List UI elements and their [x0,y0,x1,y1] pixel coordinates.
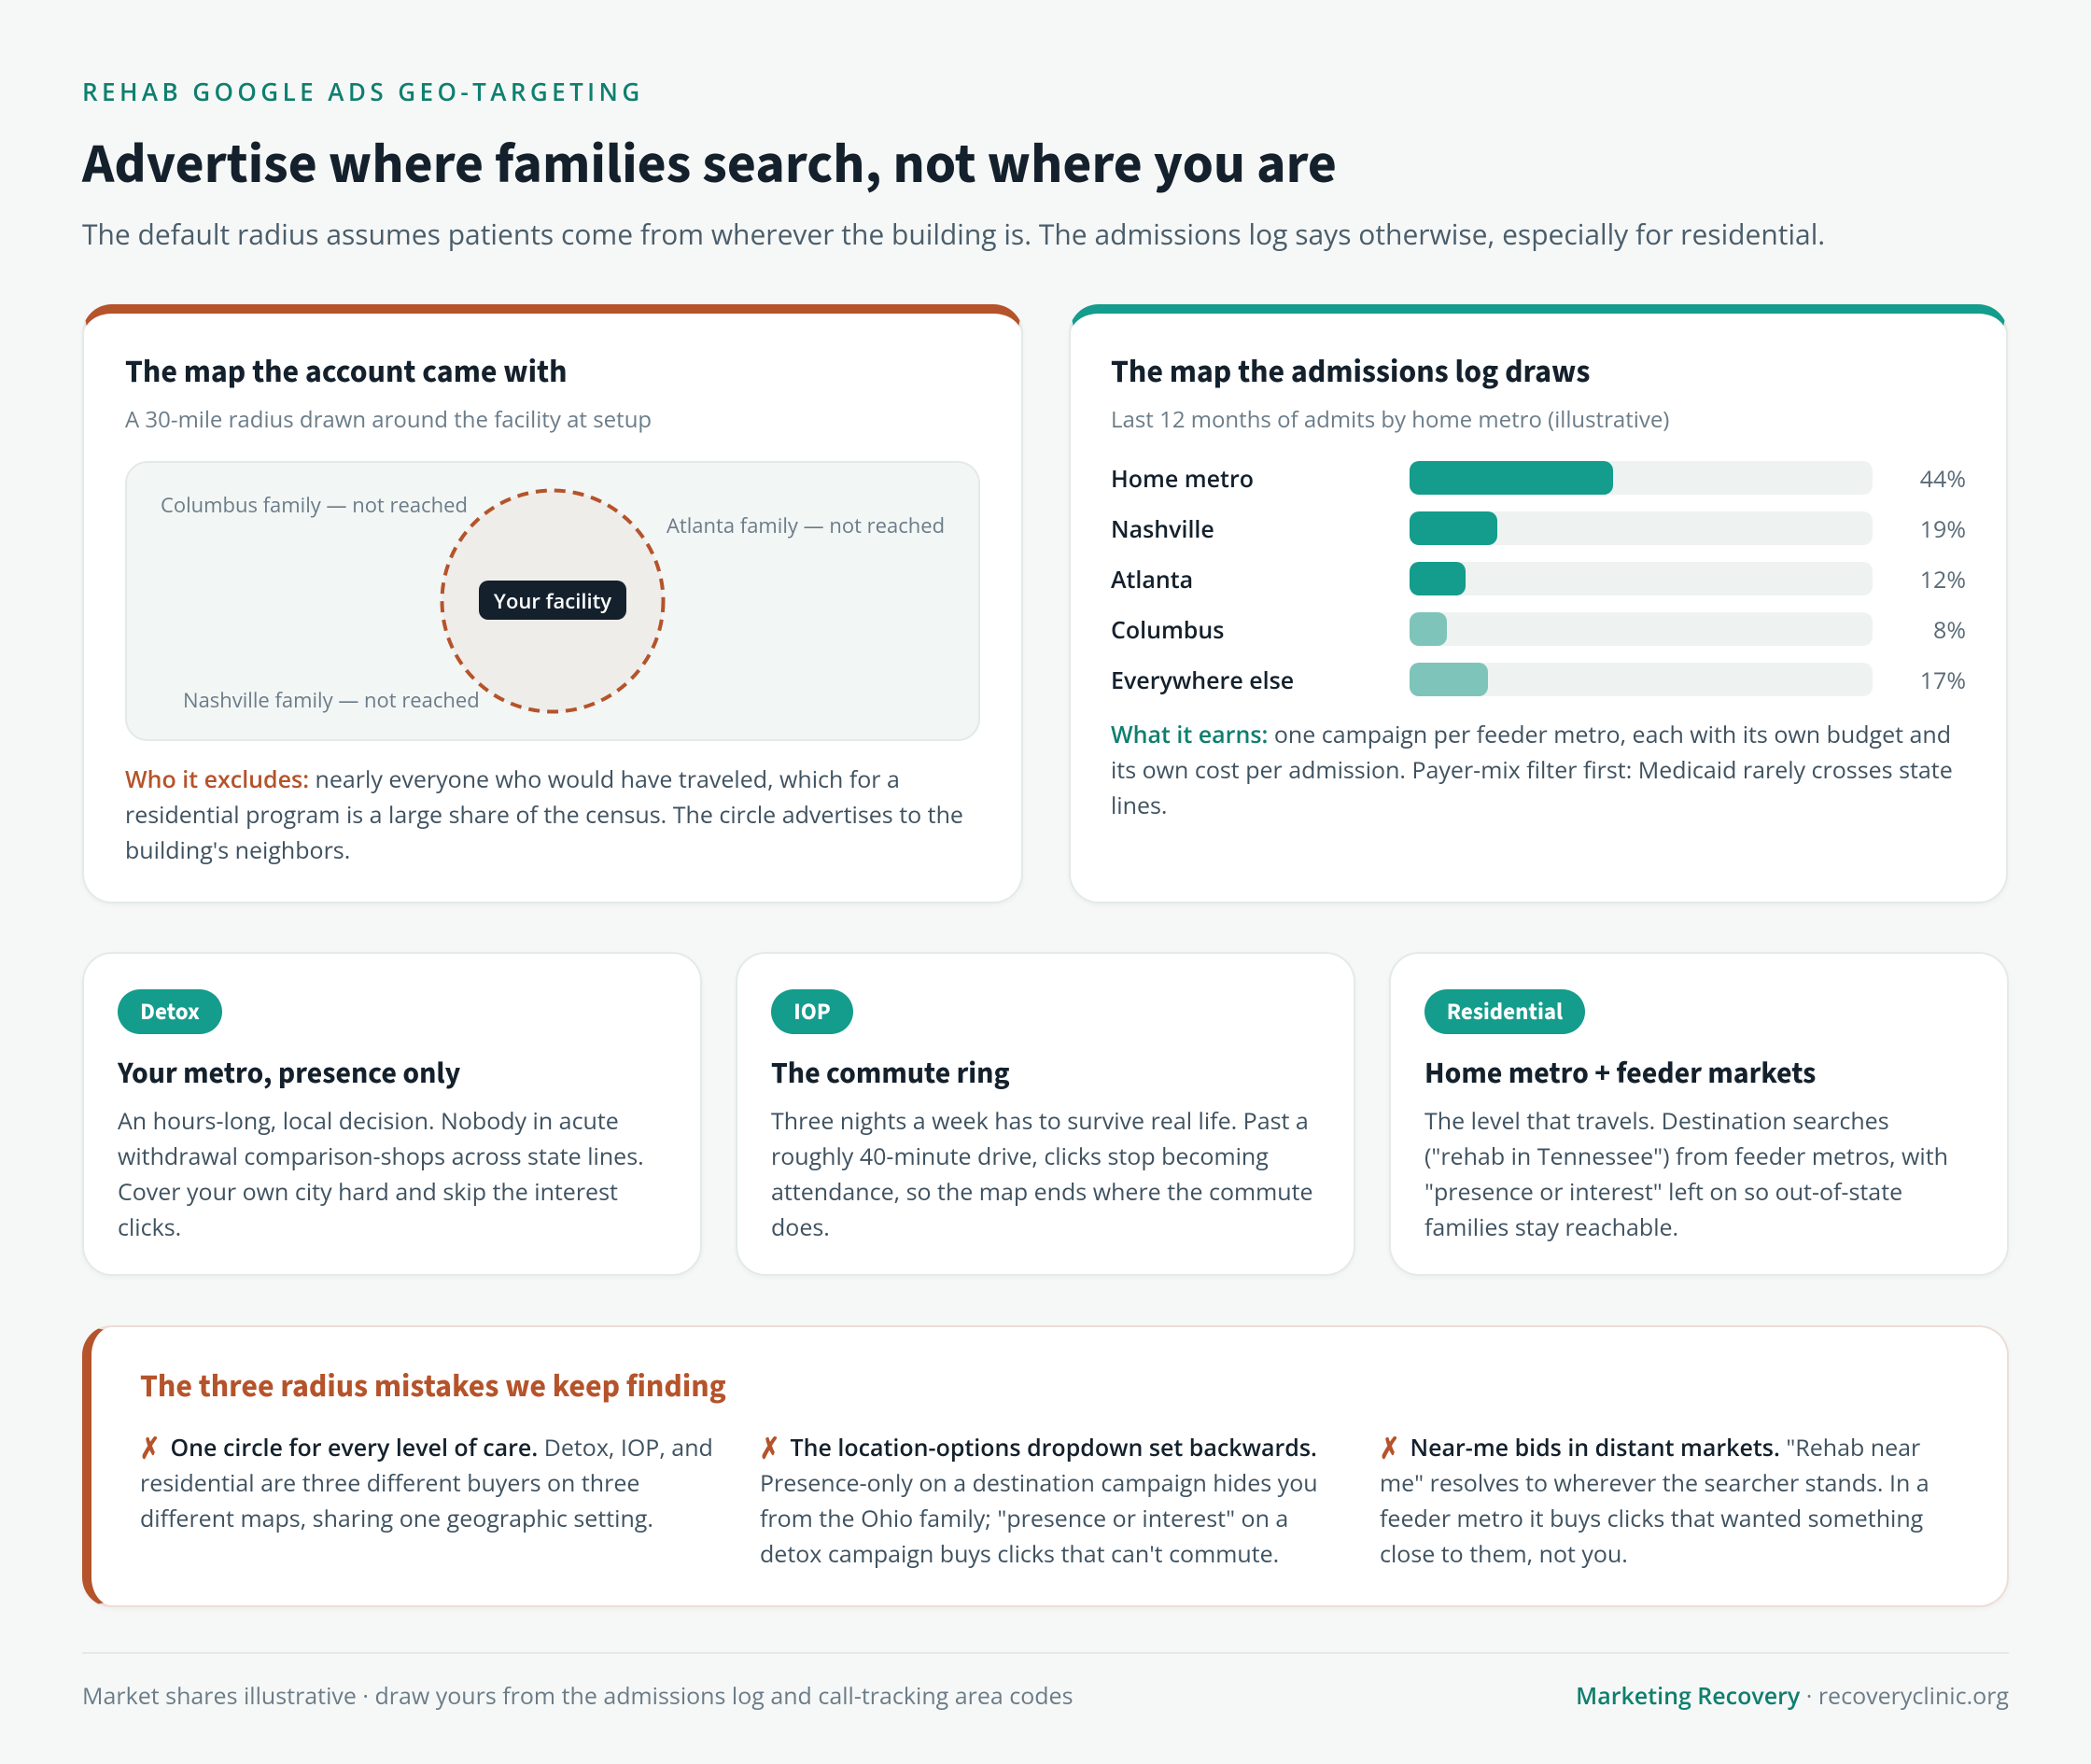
mistake 1 [140,1428,713,1534]
mistake 2: The location-options dropdown set backwards. [790,1432,1317,1463]
bar: Everywhere else: 17% [1920,665,1966,696]
bar: Columbus: 8% [1933,614,1966,646]
earnings note: lines. [1111,790,1167,821]
Columbus label: Columbus family — not reached [161,491,468,519]
panel: Residential [1389,952,2009,1276]
bar chart: admits by home metro [1111,461,1966,696]
panel heading: The map the account came with [125,349,567,395]
description: does. [771,1211,830,1243]
Nashville label: Nashville family — not reached [183,686,480,714]
mistake 1: ✗ [140,1428,160,1467]
Atlanta label: Atlanta family — not reached [667,511,945,539]
mistake 1: One circle for every level of care. Detox, IOP, and [170,1432,713,1463]
map diagram [125,461,980,741]
panel: map the account came with [82,304,1023,903]
facility label: Your facility [494,587,611,615]
description: attendance, so the map ends where the commute [771,1176,1313,1208]
bar: Atlanta: 12% [1920,564,1966,595]
panel heading: The map the admissions log draws [1111,349,1591,395]
footer source note: Market shares illustrative · draw yours from the admissions log and call-tracking area codes [82,1680,1074,1712]
heading: Home metro + feeder markets [1424,1052,1816,1095]
mistake 2: Presence-only on a destination campaign hides you [760,1467,1318,1499]
description: families stay reachable. [1424,1211,1678,1243]
bar: Columbus: Columbus [1111,614,1224,646]
bar: Nashville [1111,511,1966,545]
mistake 2: ✗ [760,1428,779,1467]
description [771,1105,1313,1243]
mistake 3: Near-me bids in distant markets. "Rehab near [1410,1432,1920,1463]
pill: IOP: IOP [793,995,831,1029]
earnings note: What it earns: one campaign per feeder metro, each with its own budget and [1111,719,1951,750]
subtitle: The default radius assumes patients come from wherever the building is. The admissions log says otherwise, especially for residential. [82,215,1825,253]
pill: Residential [1424,989,1585,1034]
pill: Residential: Residential [1447,995,1563,1029]
description: ("rehab in Tennessee") from feeder metros, with [1424,1141,1948,1172]
mistake 2: detox campaign buys clicks that can't commute. [760,1538,1279,1570]
panel subtitle: A 30-mile radius drawn around the facility at setup [125,404,652,435]
bar: Columbus [1111,612,1966,646]
panel subtitle: Last 12 months of admits by home metro (illustrative) [1111,404,1669,435]
description: Cover your own city hard and skip the interest [118,1176,618,1208]
pill: Detox [118,989,222,1034]
bar: Atlanta: Atlanta [1111,564,1193,595]
panel: IOP [736,952,1355,1276]
earnings note: its own cost per admission. Payer-mix filter first: Medicaid rarely crosses state [1111,754,1953,786]
description: The level that travels. Destination searches [1424,1105,1889,1137]
bar: Home metro: Home metro [1111,463,1254,495]
description: "presence or interest" left on so out-of-state [1424,1176,1902,1208]
description [1424,1105,1948,1243]
earnings note [1111,719,1953,821]
eyebrow: REHAB GOOGLE ADS GEO-TARGETING [82,75,644,108]
exclusion note: Who it excludes: nearly everyone who would have traveled, which for a [125,763,900,795]
mistake 2 [760,1428,1318,1570]
panel: three radius mistakes [82,1325,2009,1607]
description [118,1105,644,1243]
exclusion note: building's neighbors. [125,834,350,866]
mistake 3: ✗ [1380,1428,1399,1467]
bar: Nashville: 19% [1920,513,1966,545]
mistake 3: feeder metro it buys clicks that wanted something [1380,1503,1923,1534]
bar: Home metro [1111,461,1966,495]
mistake 1: residential are three different buyers on three [140,1467,639,1499]
radius circle [441,489,665,713]
heading: The commute ring [771,1052,1010,1095]
pill: Detox: Detox [140,995,200,1029]
pill: IOP [771,989,853,1034]
description: clicks. [118,1211,181,1243]
bar: Home metro: 44% [1920,463,1966,495]
bar: Everywhere else [1111,663,1966,696]
mistake 2: from the Ohio family; "presence or interest" on a [760,1503,1288,1534]
panel heading: The three radius mistakes we keep finding [140,1364,726,1409]
bar: Atlanta [1111,562,1966,595]
panel: map the admissions log draws [1069,304,2008,903]
exclusion note: residential program is a large share of the census. The circle advertises to the [125,799,963,831]
mistake 1: different maps, sharing one geographic setting. [140,1503,653,1534]
exclusion note [125,763,963,866]
mistake 3: me" resolves to wherever the searcher stands. In a [1380,1467,1930,1499]
title: Advertise where families search, not where you are [82,125,1337,204]
footer rule [82,1652,2009,1654]
mistake 3 [1380,1428,1930,1570]
facility label [479,581,626,620]
bar: Nashville: Nashville [1111,513,1214,545]
heading: Your metro, presence only [118,1052,460,1095]
description: An hours-long, local decision. Nobody in acute [118,1105,619,1137]
description: roughly 40-minute drive, clicks stop becoming [771,1141,1269,1172]
footer brand: Marketing Recovery · recoveryclinic.org [1576,1680,2009,1712]
description: withdrawal comparison-shops across state lines. [118,1141,644,1172]
bar: Everywhere else: Everywhere else [1111,665,1294,696]
panel: Detox [82,952,702,1276]
description: Three nights a week has to survive real life. Past a [771,1105,1309,1137]
mistake 3: close to them, not you. [1380,1538,1628,1570]
